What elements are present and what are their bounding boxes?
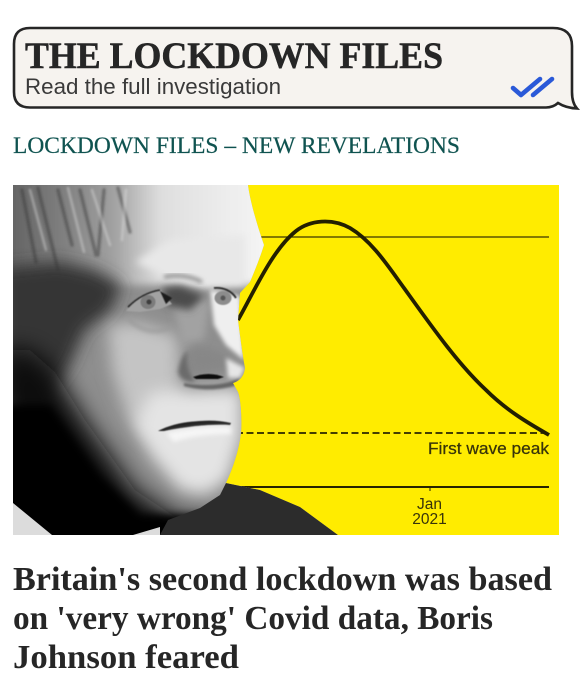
chart background <box>226 185 559 535</box>
temple shadow <box>0 262 122 400</box>
eyes <box>126 276 236 331</box>
mouth <box>158 421 231 442</box>
x axis <box>230 486 549 488</box>
label: date: Jan <box>417 496 442 513</box>
hair streaks <box>22 188 130 270</box>
headline: on 'very wrong' Covid data, Boris <box>13 600 493 637</box>
shirt collar <box>13 503 160 535</box>
label: date <box>413 498 446 524</box>
banner: speech bubble <box>14 28 577 108</box>
label: date: 2021 <box>412 511 447 528</box>
jacket <box>160 483 338 535</box>
headline: Britain's second lockdown was based <box>13 561 552 598</box>
headline <box>13 561 552 676</box>
cheek <box>108 322 190 440</box>
nose ridge <box>210 290 244 360</box>
banner subtitle: Read the full investigation <box>25 74 281 99</box>
headline: Johnson feared <box>13 639 239 676</box>
banner title: THE LOCKDOWN FILES <box>25 36 443 77</box>
section label: LOCKDOWN FILES – NEW REVELATIONS <box>13 133 460 158</box>
hair <box>13 185 264 290</box>
portrait: man in profile <box>13 185 338 535</box>
nose <box>178 347 245 389</box>
lower face <box>135 388 242 495</box>
wave curve <box>238 222 549 435</box>
image panel: portrait and chart <box>13 185 559 535</box>
first wave peak dashed line <box>236 432 549 434</box>
mid-face shading <box>172 300 210 344</box>
upper reference line <box>256 236 549 238</box>
line chart <box>230 222 550 528</box>
dark neck and back of head <box>13 339 207 520</box>
label: first wave peak: First wave peak <box>428 440 550 458</box>
icon: double tick <box>513 79 552 95</box>
forehead <box>136 247 246 292</box>
